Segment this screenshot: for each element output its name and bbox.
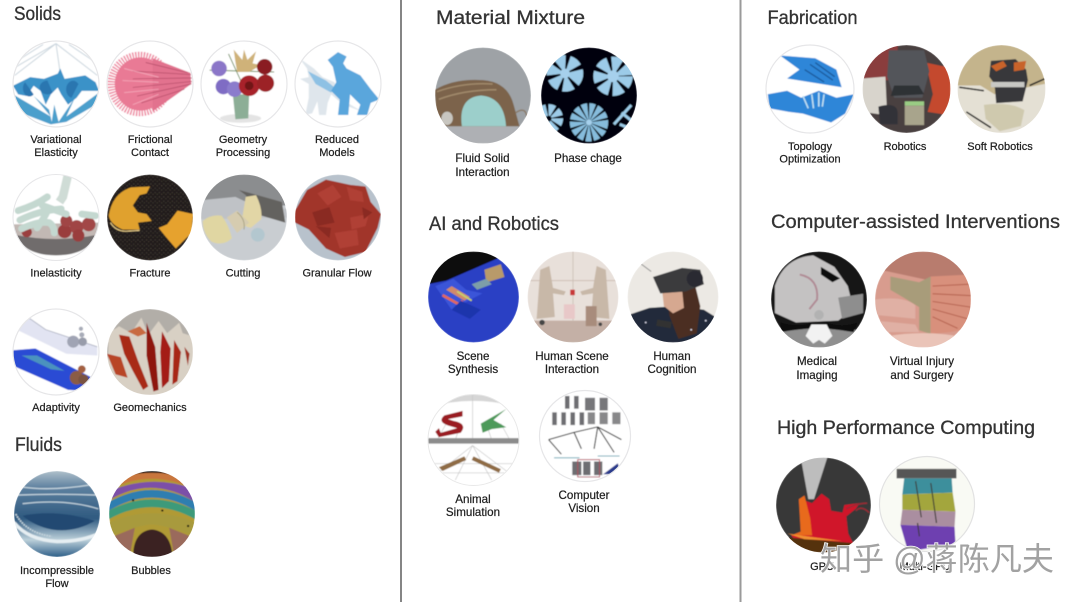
- item: Human Scene Interaction: [528, 252, 618, 376]
- panel: fluids: [14, 435, 195, 590]
- label: Human Scene: [535, 350, 609, 363]
- icon: blue room scene: [428, 252, 519, 342]
- label: Contact: [131, 147, 169, 159]
- label: Multi-GPU: [900, 561, 950, 573]
- icon: pink strands: [108, 51, 192, 117]
- icon: robot gripper: [862, 45, 950, 133]
- heading: Computer-assisted Interventions: Computer-assisted Interventions: [771, 212, 1060, 233]
- label: Vision: [568, 502, 600, 515]
- icon: blue elastic sheet: [13, 41, 99, 127]
- item: Variational Elasticity: [13, 41, 99, 159]
- item: Geometry Processing: [201, 41, 287, 159]
- item: GPU: [776, 458, 871, 573]
- label: Geometry: [219, 134, 268, 146]
- icon: red rock strata: [107, 309, 193, 395]
- label: GPU: [810, 561, 834, 573]
- icon: red granular mass: [295, 174, 381, 260]
- label: Interaction: [455, 166, 510, 179]
- label: Processing: [216, 147, 270, 159]
- item: Computer Vision: [540, 390, 630, 515]
- item: Topology Optimization: [766, 45, 854, 166]
- label: Variational: [30, 134, 82, 146]
- item: Fracture: [107, 174, 193, 280]
- panel: material mixture: [435, 8, 637, 179]
- watermark: 知乎 @蒋陈凡夫: [820, 541, 1054, 577]
- icon: animal models on grid: [428, 394, 519, 486]
- item: Cutting: [201, 174, 287, 280]
- label: Scene: [457, 350, 489, 363]
- label: Geomechanics: [113, 402, 187, 414]
- icon: water wave: [14, 471, 100, 557]
- item: Animal Simulation: [428, 394, 519, 519]
- item: Bubbles: [109, 471, 195, 577]
- label: Cutting: [226, 268, 260, 280]
- icon: ramp with rocks: [14, 318, 98, 391]
- panel: AI and robotics: [428, 214, 718, 519]
- icon: soap film colors: [109, 471, 195, 557]
- icon: fluid solid ball: [435, 48, 531, 144]
- label: Medical: [797, 355, 837, 368]
- icon: dinosaur models: [300, 52, 378, 116]
- label: Simulation: [446, 506, 500, 519]
- label: Optimization: [779, 154, 841, 166]
- item: Granular Flow: [295, 174, 381, 280]
- icon: red fluid on dark: [776, 458, 871, 552]
- column divider left: [400, 0, 402, 602]
- item: Phase chage: [540, 48, 637, 165]
- label: Animal: [455, 493, 491, 506]
- item: Inelasticity: [13, 174, 99, 280]
- heading: High Performance Computing: High Performance Computing: [777, 418, 1035, 439]
- icon: ice crystals: [540, 48, 637, 144]
- icon: CT scan: [771, 252, 867, 348]
- label: Soft Robotics: [967, 141, 1033, 153]
- item: Medical Imaging: [771, 252, 867, 382]
- label: Fracture: [130, 268, 170, 280]
- item: Geomechanics: [107, 309, 193, 414]
- heading: AI and Robotics: AI and Robotics: [429, 214, 559, 235]
- item: Frictional Contact: [107, 41, 193, 159]
- label: Phase chage: [554, 152, 622, 165]
- icon: person in VR headset: [628, 252, 718, 342]
- item: Soft Robotics: [958, 45, 1046, 153]
- panel: high performance computing: [776, 418, 1035, 573]
- item: Reduced Models: [295, 41, 381, 159]
- icon: pose figures and graph: [540, 390, 630, 482]
- label: Interaction: [545, 363, 599, 376]
- label: Topology: [788, 141, 833, 153]
- item: Human Cognition: [628, 252, 718, 376]
- column divider right: [740, 0, 742, 602]
- item: Fluid Solid Interaction: [435, 48, 531, 179]
- label: Flow: [45, 578, 69, 590]
- heading: Solids: Solids: [14, 4, 61, 25]
- item: Incompressible Flow: [14, 471, 100, 590]
- icon: layered colored bars: [880, 456, 974, 552]
- icon: soft drone robot: [958, 45, 1046, 133]
- item: Virtual Injury and Surgery: [875, 252, 971, 382]
- label: Adaptivity: [32, 402, 80, 414]
- label: Inelasticity: [30, 268, 82, 280]
- panel: fabrication: [766, 8, 1046, 166]
- label: Human: [653, 350, 691, 363]
- icon: fractured orange on dark: [107, 174, 193, 260]
- label: Reduced: [315, 134, 359, 146]
- icon: mannequins in room: [528, 252, 618, 342]
- icon: knife cutting soft block: [201, 174, 287, 260]
- item: Scene Synthesis: [428, 252, 519, 376]
- label: Granular Flow: [302, 268, 372, 280]
- label: Models: [319, 147, 355, 159]
- label: Imaging: [796, 369, 838, 382]
- label: Frictional: [128, 134, 172, 146]
- panel: computer-assisted interventions: [771, 212, 1060, 382]
- label: Elasticity: [34, 147, 78, 159]
- icon: flower vase: [209, 50, 275, 123]
- item: Robotics: [862, 45, 950, 153]
- label: Bubbles: [131, 565, 171, 577]
- icon: bowl of worms: [13, 174, 99, 260]
- label: Computer: [559, 489, 610, 502]
- label: Synthesis: [448, 363, 498, 376]
- heading: Material Mixture: Material Mixture: [436, 8, 585, 29]
- label: Robotics: [884, 141, 927, 153]
- label: Cognition: [648, 363, 696, 376]
- item: Adaptivity: [13, 309, 99, 414]
- label: and Surgery: [890, 369, 954, 382]
- label: Incompressible: [20, 565, 94, 577]
- heading: Fabrication: Fabrication: [768, 8, 858, 29]
- icon: blue topology structure: [766, 45, 854, 133]
- label: Virtual Injury: [890, 355, 954, 368]
- icon: muscle anatomy: [875, 252, 971, 348]
- heading: Fluids: Fluids: [15, 435, 62, 456]
- item: Multi-GPU: [880, 456, 974, 573]
- label: Fluid Solid: [455, 152, 510, 165]
- panel: solids: [13, 4, 381, 414]
